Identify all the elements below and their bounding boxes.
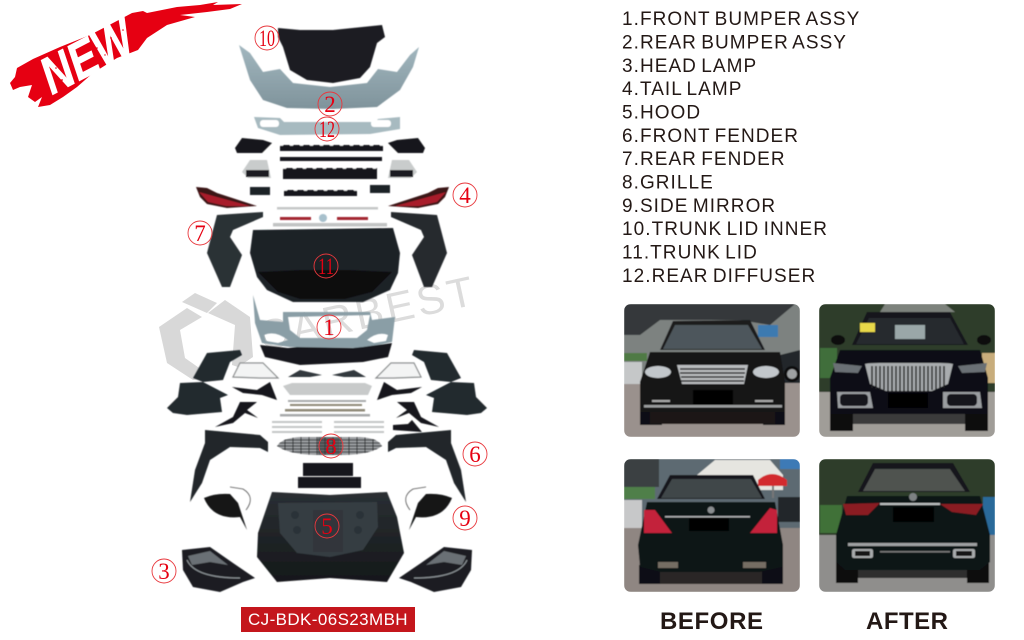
new banner: NEW	[31, 8, 146, 106]
label: before: BEFORE	[660, 608, 764, 635]
part: black brackets left	[235, 138, 272, 153]
part: bumper lower black	[260, 343, 392, 365]
part: chrome trim and trunk lamps	[273, 207, 387, 226]
part: chrome frame left	[233, 363, 278, 378]
photo: after front	[819, 304, 995, 437]
callout 5: 5	[321, 514, 333, 539]
exploded parts diagram	[167, 25, 487, 592]
callout 4: 4	[459, 183, 471, 208]
part: small corner bracket	[393, 420, 422, 432]
callout 3: 3	[158, 559, 170, 584]
part: small bracket right	[370, 185, 390, 193]
product code badge: CJ-BDK-06S23MBH	[248, 610, 408, 629]
callout 7: 7	[194, 221, 206, 246]
parts list: 11.TRUNK LID	[622, 242, 758, 264]
part: chrome exhaust tip left	[242, 160, 271, 178]
callout 10: 10	[259, 26, 275, 51]
parts list: 12.REAR DIFFUSER	[622, 266, 816, 287]
part: front fender right	[388, 430, 466, 502]
callout 8: 8	[325, 434, 337, 459]
watermark	[159, 267, 481, 380]
part: chrome strips	[272, 383, 384, 433]
parts list: 6.FRONT FENDER	[622, 126, 799, 147]
photo: before front	[624, 304, 800, 437]
part: diffuser cutouts	[260, 120, 391, 127]
part: side mirror right	[406, 487, 452, 530]
part: small bracket left	[250, 187, 270, 195]
callout 1	[317, 315, 341, 340]
parts list: 8.GRILLE	[622, 172, 714, 194]
part: lamp trims	[288, 370, 366, 377]
callout 2	[318, 92, 342, 117]
new banner	[10, 2, 242, 107]
number callouts	[152, 26, 487, 584]
part: tail lamp left	[196, 187, 257, 208]
part: head lamp left	[182, 547, 255, 592]
callout 8	[319, 434, 343, 459]
parts list: 7.REAR FENDER	[622, 149, 786, 170]
part: front fender left	[190, 430, 268, 502]
parts list	[622, 9, 860, 287]
callout 5	[315, 514, 339, 539]
part: wheel arch liners left	[167, 350, 242, 415]
part: grille	[277, 437, 382, 455]
part: trunk lid	[250, 228, 400, 302]
callout 7	[188, 221, 212, 246]
label: after: AFTER	[866, 608, 948, 635]
callout 2: 2	[324, 92, 336, 117]
parts list: 5.HOOD	[622, 102, 701, 124]
callout 3	[152, 559, 176, 584]
callout 6: 6	[469, 442, 481, 467]
part: tail lamp right	[388, 187, 449, 208]
parts list: 10.TRUNK LID INNER	[622, 219, 828, 240]
parts list: 1.FRONT BUMPER ASSY	[622, 9, 860, 30]
callout 12: 12	[319, 117, 335, 142]
parts list: 2.REAR BUMPER ASSY	[622, 32, 847, 54]
part: chrome exhaust tip right	[388, 160, 417, 178]
callout 6	[463, 442, 487, 467]
part: rear fender right	[391, 212, 447, 287]
photo: before rear	[624, 459, 800, 592]
part: hood	[257, 492, 404, 582]
part: strip serrations	[280, 145, 383, 190]
part: trunk lid inner	[278, 25, 385, 83]
part: chrome frame right	[376, 363, 421, 378]
callout 9: 9	[459, 506, 471, 531]
callout 4	[453, 183, 477, 208]
callout 1: 1	[323, 315, 335, 340]
part: side mirror left	[204, 487, 250, 530]
part: support brackets right	[377, 382, 439, 427]
part: front bumper	[253, 295, 398, 348]
product code badge	[241, 607, 415, 632]
part: support brackets left	[215, 382, 277, 427]
part: black brackets right	[388, 138, 425, 153]
callout 9	[453, 506, 477, 531]
part: rear bumper	[239, 45, 419, 109]
parts list: 4.TAIL LAMP	[622, 79, 742, 100]
part: rear fender left	[207, 212, 263, 287]
part: rear diffuser	[254, 117, 400, 135]
part: rear reinforcement strips	[280, 145, 383, 196]
watermark: CARBEST	[254, 267, 481, 360]
parts list: 9.SIDE MIRROR	[622, 196, 776, 217]
part: wheel arch liners right	[412, 350, 487, 415]
callout 11: 11	[318, 254, 334, 279]
part: plate brackets	[298, 463, 361, 488]
part: head lamp right	[399, 547, 472, 592]
photo: after rear	[819, 459, 995, 592]
parts list: 3.HEAD LAMP	[622, 56, 757, 77]
